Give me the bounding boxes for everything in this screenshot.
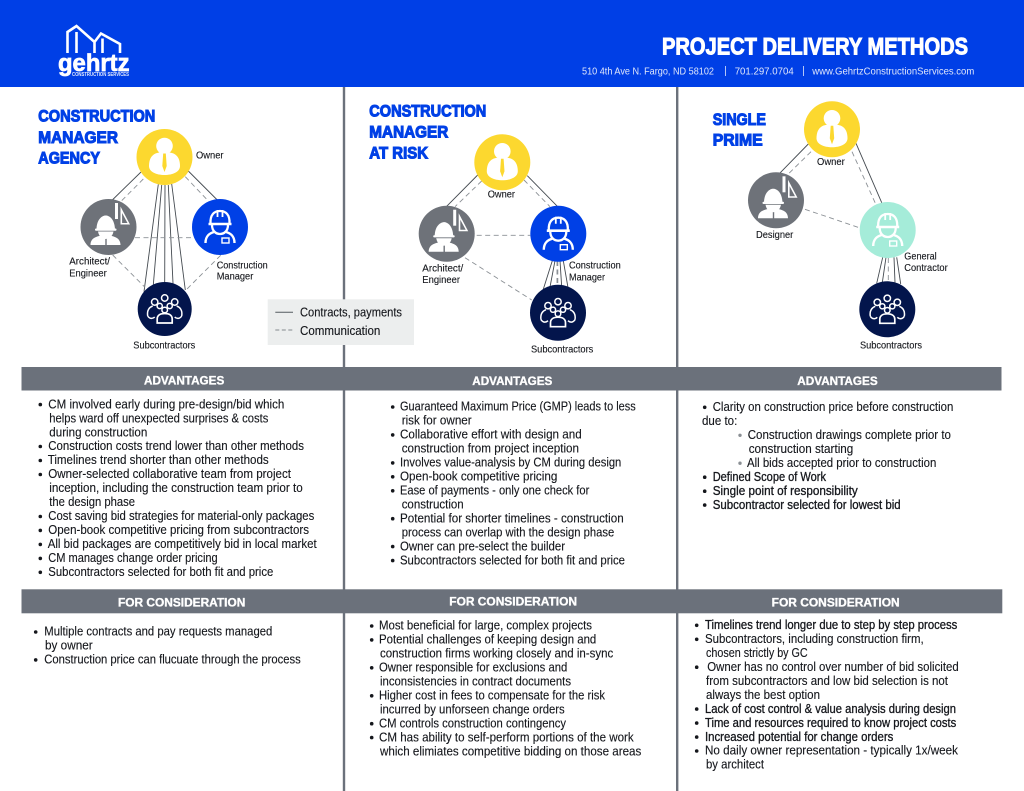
text block: CM at Risk advantages: construction xyxy=(402,497,464,511)
heading: Single Prime: PRIME xyxy=(713,131,763,150)
text block: CM at Risk considerations: construction firms working closely and in-sync xyxy=(380,647,613,661)
role labels: Engineer xyxy=(69,268,107,279)
contact line: 510 4th Ave N. Fargo, ND 58102 xyxy=(582,66,714,78)
text block: Single Prime considerations: always the best option xyxy=(706,688,820,702)
icon: architect/engineer xyxy=(80,199,136,255)
text block: CM at Risk considerations: Most beneficial for large, complex projects xyxy=(379,619,592,633)
role labels xyxy=(69,150,268,351)
text block: Single Prime advantages: Clarity on construction price before construction xyxy=(713,400,953,414)
contact line xyxy=(582,66,975,78)
contact line: www.GehrtzConstructionServices.com xyxy=(811,66,975,78)
section bar: For Consideration: FOR CONSIDERATION xyxy=(118,596,245,610)
icon: construction manager xyxy=(530,206,586,262)
section bar: Advantages: ADVANTAGES xyxy=(797,374,878,388)
icon: subcontractors xyxy=(530,285,586,341)
section bar: Advantages: ADVANTAGES xyxy=(144,374,224,388)
text block: Single Prime considerations: by architect xyxy=(706,758,764,772)
text block: Single Prime considerations: Lack of cost control & value analysis during design xyxy=(705,702,956,716)
logo: Gehrtz Construction Services: CONSTRUCTION SERVICES xyxy=(72,72,130,78)
panel: Construction Manager at Risk diagram xyxy=(369,101,621,355)
heading: Construction Manager Agency: CONSTRUCTION xyxy=(38,107,155,126)
legend: Contracts, payments xyxy=(300,305,402,319)
text block: CM Agency advantages: Subcontractors selected for both fit and price xyxy=(48,565,273,579)
text block: CM at Risk advantages: Potential for shorter timelines - construction xyxy=(400,511,624,525)
text block: Single Prime considerations: Timelines trend longer due to step by step process xyxy=(705,618,957,632)
panel: Single Prime diagram xyxy=(713,101,948,352)
text block: Single Prime considerations xyxy=(695,618,959,772)
legend: Communication xyxy=(300,324,380,338)
icon: construction manager xyxy=(192,199,248,255)
section bar: For Consideration: FOR CONSIDERATION xyxy=(772,596,900,610)
icon: subcontractors xyxy=(859,281,915,337)
legend xyxy=(268,299,414,345)
text block: CM at Risk advantages: Guaranteed Maximum Price (GMP) leads to less xyxy=(400,400,636,414)
panel: Construction Manager Agency diagram xyxy=(38,107,268,351)
role labels: Manager xyxy=(569,272,605,283)
heading: Single Prime xyxy=(713,110,766,150)
heading: Construction Manager at Risk: CONSTRUCTION xyxy=(369,101,486,120)
connector lines xyxy=(112,171,221,292)
role labels: Owner xyxy=(488,190,515,201)
text block: CM Agency advantages: Open-book competitive pricing from subcontractors xyxy=(48,523,309,537)
text block: CM at Risk considerations: CM has ability to self-perform portions of the work xyxy=(379,730,634,744)
role labels: Owner xyxy=(817,157,845,168)
role labels: Architect/ xyxy=(422,263,463,274)
text block: CM Agency advantages: All bid packages are competitively bid in local market xyxy=(48,537,317,551)
contact line: 701.297.0704 xyxy=(735,66,794,78)
text block: CM Agency advantages: inception, including the construction team prior to xyxy=(49,481,303,495)
title: PROJECT DELIVERY METHODS xyxy=(662,33,968,60)
icon: owner xyxy=(804,101,860,157)
text block: CM Agency advantages: the design phase xyxy=(49,495,135,509)
heading: Construction Manager at Risk: AT RISK xyxy=(369,144,429,163)
text block: CM Agency advantages: Owner-selected collaborative team from project xyxy=(48,467,291,481)
heading: Construction Manager at Risk xyxy=(369,101,486,163)
heading: Construction Manager Agency xyxy=(38,107,155,168)
text block: Single Prime advantages: due to: xyxy=(702,414,737,428)
text block: CM at Risk considerations: inconsistencies in contract documents xyxy=(380,674,571,688)
role labels xyxy=(422,190,621,355)
text block: CM Agency advantages: CM involved early during pre-design/bid which xyxy=(48,397,284,411)
icon: designer xyxy=(748,172,804,228)
text block: CM at Risk considerations: Higher cost in fees to compensate for the risk xyxy=(379,688,606,702)
heading: Construction Manager Agency: AGENCY xyxy=(38,149,101,168)
text block: CM at Risk advantages: construction from project inception xyxy=(402,442,579,456)
role labels: Owner xyxy=(196,150,224,162)
connector lines xyxy=(446,175,568,300)
text block: CM at Risk considerations: which elimiates competitive bidding on those areas xyxy=(379,744,641,758)
text block: Single Prime considerations: chosen strictly by GC xyxy=(706,646,808,660)
text block: CM at Risk advantages: Subcontractors selected for both fit and price xyxy=(400,553,625,567)
role labels: General xyxy=(904,251,937,262)
text block: CM Agency considerations: Construction price can flucuate through the process xyxy=(44,653,301,667)
text block: Single Prime considerations: Time and resources required to know project costs xyxy=(705,716,956,730)
text block: Single Prime advantages: All bids accepted prior to construction xyxy=(747,456,936,470)
text block: CM at Risk advantages xyxy=(391,400,636,567)
header band xyxy=(0,0,1024,87)
role labels: Construction xyxy=(569,261,621,272)
text block: CM Agency advantages: Cost saving bid strategies for material-only packages xyxy=(48,509,314,523)
role labels: Contractor xyxy=(904,263,948,274)
text block: Single Prime advantages: Subcontractor selected for lowest bid xyxy=(713,498,901,512)
text block: CM at Risk considerations: Owner responsible for exclusions and xyxy=(379,660,567,674)
text block: CM at Risk advantages: Involves value-analysis by CM during design xyxy=(400,456,621,470)
text block: CM at Risk advantages: Owner can pre-select the builder xyxy=(400,539,565,553)
icon: general contractor xyxy=(860,202,916,258)
text block: CM at Risk advantages: Open-book competitive pricing xyxy=(400,470,557,484)
text block: Single Prime advantages xyxy=(702,400,953,512)
role labels: Subcontractors xyxy=(133,340,195,351)
text block: Single Prime considerations: No daily owner representation - typically 1x/week xyxy=(705,744,959,758)
text block: Single Prime advantages: construction starting xyxy=(749,442,853,456)
text block: Single Prime advantages: Defined Scope of Work xyxy=(713,470,827,484)
role labels: Engineer xyxy=(422,275,460,286)
connector lines xyxy=(779,143,901,284)
section bar: Advantages: ADVANTAGES xyxy=(472,374,552,388)
role labels: Subcontractors xyxy=(860,341,922,352)
text block: CM at Risk advantages: risk for owner xyxy=(402,414,472,428)
text block: CM at Risk considerations: CM controls construction contingency xyxy=(379,716,567,730)
text block: CM Agency considerations: Multiple contracts and pay requests managed xyxy=(44,625,272,639)
text block: CM Agency advantages: Timelines trend shorter than other methods xyxy=(48,453,269,467)
heading: Single Prime: SINGLE xyxy=(713,110,766,129)
heading: Construction Manager Agency: MANAGER xyxy=(38,128,118,147)
text block: CM at Risk advantages: Ease of payments - only one check for xyxy=(400,484,589,498)
text block: CM at Risk considerations: incurred by unforseen change orders xyxy=(380,702,565,716)
icon: architect/engineer xyxy=(419,206,475,262)
text block: CM Agency advantages xyxy=(38,397,317,579)
icon: owner xyxy=(474,134,530,190)
text block: CM at Risk advantages: Collaborative effort with design and xyxy=(400,428,582,442)
text block: Single Prime advantages: Single point of responsibility xyxy=(713,484,858,498)
role labels: Architect/ xyxy=(69,257,110,268)
text block: CM at Risk considerations: Potential challenges of keeping design and xyxy=(379,633,596,647)
section bar: Advantages xyxy=(22,367,1002,390)
role labels: Subcontractors xyxy=(531,344,593,355)
logo: Gehrtz Construction Services xyxy=(58,26,130,78)
text block: Single Prime considerations: Increased potential for change orders xyxy=(705,730,893,744)
role labels xyxy=(756,157,948,352)
text block: CM Agency advantages: CM manages change order pricing xyxy=(48,551,218,565)
icon: subcontractors xyxy=(138,282,192,336)
role labels: Designer xyxy=(756,230,794,241)
section bar: For Consideration xyxy=(22,589,1002,613)
text block: Single Prime considerations: from subcontractors and low bid selection is not xyxy=(706,674,948,688)
text block: CM Agency advantages: Construction costs trend lower than other methods xyxy=(48,439,304,453)
text block: CM Agency considerations xyxy=(34,625,301,667)
heading: Construction Manager at Risk: MANAGER xyxy=(369,123,448,142)
text block: Single Prime advantages: Construction drawings complete prior to xyxy=(748,428,951,442)
logo: Gehrtz Construction Services: gehrtz xyxy=(58,50,130,77)
text block: Single Prime considerations: Owner has no control over number of bid solicited xyxy=(707,660,959,674)
text block: CM Agency considerations: by owner xyxy=(45,639,93,653)
text block: CM at Risk advantages: process can overlap with the design phase xyxy=(402,525,614,539)
text block: CM at Risk considerations xyxy=(370,619,641,758)
text block: Single Prime considerations: Subcontractors, including construction firm, xyxy=(705,632,924,646)
icon: owner xyxy=(136,129,192,185)
column dividers xyxy=(343,87,678,791)
role labels: Construction xyxy=(217,260,268,271)
role labels: Manager xyxy=(217,272,254,283)
section bar: For Consideration: FOR CONSIDERATION xyxy=(449,595,577,609)
text block: CM Agency advantages: during construction xyxy=(49,425,147,439)
text block: CM Agency advantages: helps ward off unexpected surprises & costs xyxy=(49,411,268,425)
